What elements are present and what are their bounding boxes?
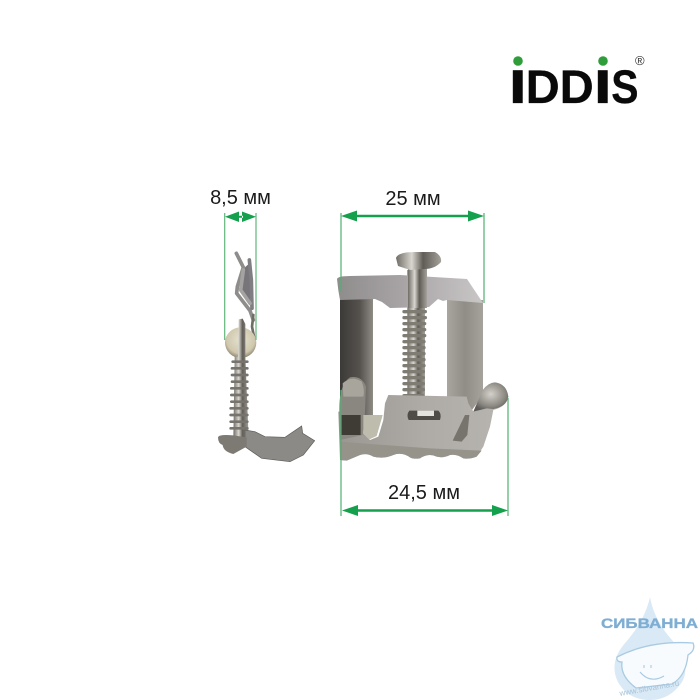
slot bbox=[407, 411, 441, 420]
foot plate bbox=[245, 426, 315, 462]
logo wordmark: D bbox=[526, 60, 560, 113]
water drop bbox=[614, 597, 685, 700]
clip front plate bbox=[338, 377, 508, 461]
logo wordmark: I bbox=[594, 61, 612, 114]
extension lines bbox=[225, 213, 256, 340]
logo wordmark: D bbox=[560, 60, 594, 113]
hook highlight bbox=[363, 415, 383, 439]
logo wordmark: I bbox=[509, 61, 527, 114]
clip tines bbox=[236, 253, 254, 337]
left vertical strip bbox=[340, 298, 373, 445]
double arrow bbox=[341, 210, 484, 222]
logo: IDDIS bbox=[509, 53, 645, 114]
bathtub bbox=[617, 643, 694, 688]
photo: side view of clip bbox=[218, 253, 315, 462]
logo wordmark: S bbox=[611, 61, 639, 114]
double arrow bbox=[342, 505, 508, 516]
registered mark: ® bbox=[635, 53, 645, 68]
hook tab bbox=[339, 377, 366, 443]
top plate bbox=[337, 275, 483, 308]
site url: www.sibvanna.ru bbox=[618, 679, 680, 698]
screw thread bbox=[231, 362, 247, 428]
dimension: 25 mm bbox=[341, 188, 484, 303]
lower shade bbox=[340, 442, 482, 461]
dimension: 24,5 mm bbox=[341, 390, 508, 516]
double arrow bbox=[225, 212, 256, 222]
screw head bbox=[396, 252, 441, 270]
logo wordmark bbox=[509, 60, 639, 114]
screw neck bbox=[408, 266, 427, 308]
bathtub face bbox=[640, 665, 664, 679]
rounded right lobe bbox=[473, 382, 508, 412]
dimension: 8,5 mm bbox=[210, 187, 271, 340]
extension lines bbox=[341, 213, 484, 303]
brand name: СИБВАННА bbox=[601, 615, 698, 631]
logo: Sibvanna watermark bbox=[601, 597, 698, 700]
label: 24,5 мм bbox=[388, 482, 460, 504]
screw shaft bbox=[233, 319, 249, 438]
logo green dot 2 bbox=[598, 56, 608, 66]
dark hook recess bbox=[341, 415, 361, 435]
nylon ball bbox=[225, 327, 256, 358]
label: 25 мм bbox=[385, 188, 441, 210]
screw head bbox=[218, 435, 247, 454]
extension lines bbox=[341, 390, 508, 516]
screw thread bbox=[404, 270, 425, 400]
right vertical strip bbox=[447, 300, 483, 410]
label: 8,5 мм bbox=[210, 187, 271, 209]
curved slit bbox=[453, 415, 469, 442]
photo: front view of clip bbox=[337, 252, 508, 461]
logo green dot 1 bbox=[513, 56, 523, 66]
clip body fill bbox=[240, 263, 252, 308]
